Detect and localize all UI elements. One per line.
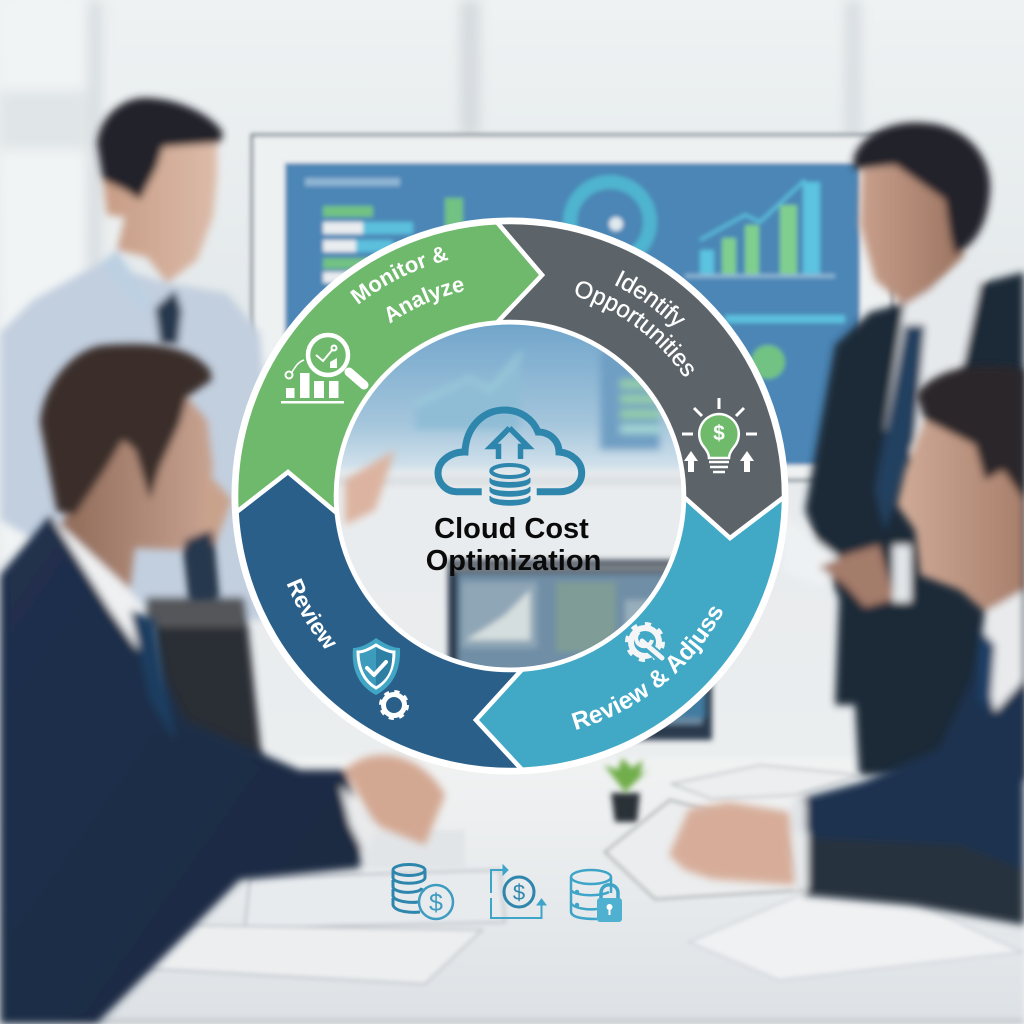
segment: monitor and analyze (green) xyxy=(236,223,545,514)
window frames xyxy=(0,0,861,560)
plant xyxy=(604,758,650,822)
presentation screen xyxy=(252,135,892,480)
label: analyze: Analyze xyxy=(386,280,464,324)
centre title xyxy=(426,513,601,577)
small monitor xyxy=(448,560,712,740)
centre title: Optimization xyxy=(426,545,601,577)
icon: light bulb with dollar xyxy=(682,398,757,472)
label: review: Review xyxy=(286,578,336,649)
label: opportunities: Opportunities xyxy=(576,281,694,376)
label: identify: Identify xyxy=(615,270,686,327)
icon: coins with dollar: $ xyxy=(429,889,443,917)
centre: cloud with database icon xyxy=(438,410,582,505)
inner white ring xyxy=(336,322,684,670)
person: back left, light blue shirt xyxy=(0,98,267,760)
icon: light bulb with dollar: $ xyxy=(713,422,725,445)
icon: dollar cycle arrows xyxy=(491,865,546,918)
person: front right, navy suit xyxy=(669,365,1024,925)
label: monitor: Monitor & xyxy=(350,247,448,304)
icon: dollar cycle arrows: $ xyxy=(513,880,525,905)
centre title: Cloud Cost xyxy=(434,513,589,545)
centre backdrop seen through the ring xyxy=(330,320,690,565)
icon: coins with dollar xyxy=(393,864,453,919)
segment: review (navy) xyxy=(237,475,518,770)
person: back right, dark suit xyxy=(779,123,1024,780)
label: review and adjuss: Review & Adjuss xyxy=(572,606,722,730)
notebooks on table xyxy=(136,765,1022,984)
icon: magnifier over chart xyxy=(281,335,364,404)
outer white ring xyxy=(234,220,786,772)
table xyxy=(98,758,1024,1024)
segment: review and adjust (teal) xyxy=(473,500,784,769)
cycle diagram xyxy=(232,218,788,774)
icon: shield and gear xyxy=(353,638,407,718)
icon: gear with wrench xyxy=(628,624,662,660)
segment: identify opportunities (grey) xyxy=(500,222,784,541)
person: front left, navy suit xyxy=(0,344,445,1024)
icon: database with lock xyxy=(571,870,622,922)
